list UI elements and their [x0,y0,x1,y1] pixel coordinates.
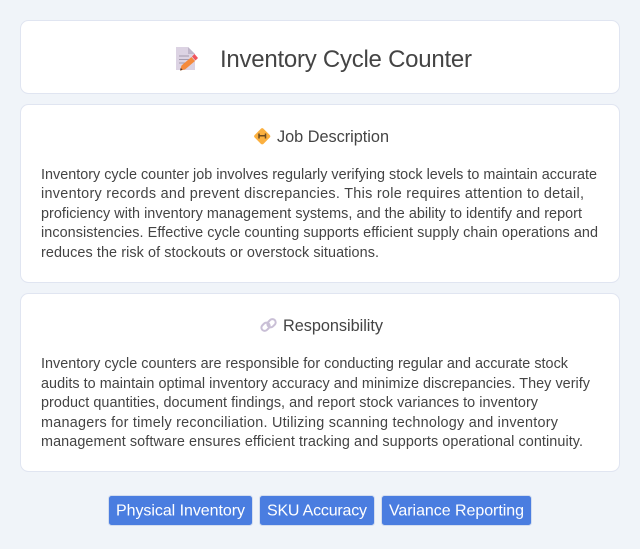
text block: job description: proficiency with inventory management systems, and the ability to identify and report [41,206,582,222]
tag: sku accuracy [260,496,374,526]
icon: construction sign [253,127,271,145]
heading: responsibility: Responsibility [283,317,384,335]
title: Inventory Cycle Counter [220,46,472,73]
panel: title card [20,20,620,94]
tag: variance reporting [382,496,532,526]
text block: job description: Inventory cycle counter job involves regularly verifying stock levels to maintain accurate [41,167,597,183]
text block: responsibility: managers for timely reconciliation. Utilizing scanning technology and inventory [41,415,559,431]
text block: responsibility: product quantities, document findings, and report stock variances to inventory [41,395,539,411]
text block: responsibility: Inventory cycle counters are responsible for conducting regular and accurate stock [41,356,569,372]
panel: responsibility [20,294,620,472]
tag: physical inventory: Physical Inventory [116,502,245,520]
text block: responsibility: audits to maintain optimal inventory accuracy and minimize discrepancies. They verify [41,376,591,392]
text block: job description: inconsistencies. Effective cycle counting supports efficient supply chain operations and [41,225,598,241]
icon: memo with pencil [176,47,198,70]
text block: job description [41,167,598,261]
tag: variance reporting: Variance Reporting [389,502,524,520]
heading: job description: Job Description [277,128,389,146]
tags [108,496,532,526]
text block: responsibility: management software ensures efficient tracking and supports operational continuity. [41,434,583,450]
text block: job description: inventory records and prevent discrepancies. This role requires attention to detail, [41,186,584,202]
tag: physical inventory [108,496,252,526]
panel: job description [20,104,620,282]
text block: job description: reduces the risk of stockouts or overstock situations. [41,245,379,261]
tag: sku accuracy: SKU Accuracy [267,502,367,520]
icon: link [260,318,277,332]
text block: responsibility [41,356,591,450]
